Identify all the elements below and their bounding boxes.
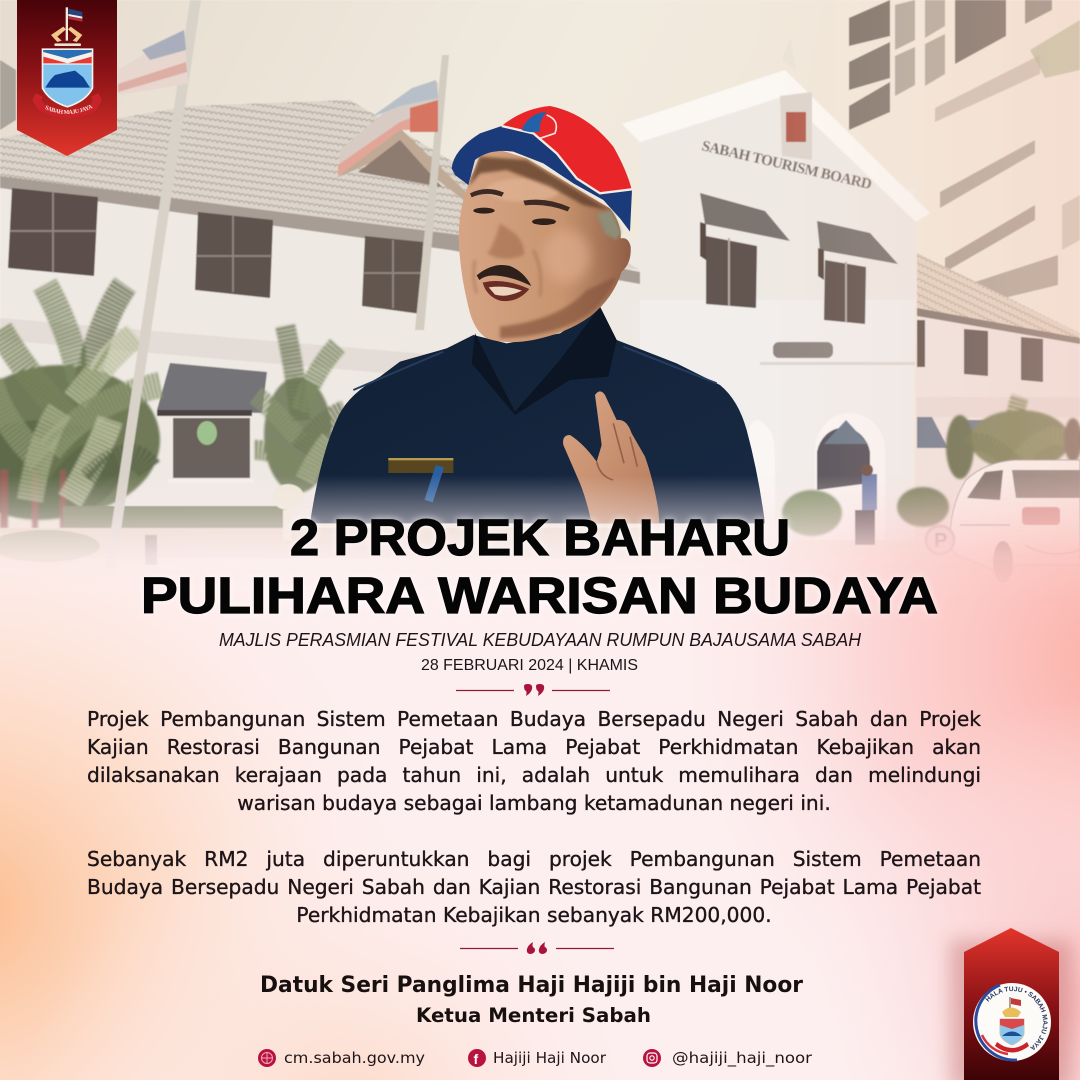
lower window and awning: [173, 418, 250, 478]
hand: [563, 391, 659, 523]
main gable building: SABAH TOURISM BOARD: [700, 138, 873, 193]
visor shadow on forehead: [468, 157, 608, 210]
title: 2 PROJEK BAHARU: [290, 509, 790, 566]
footer: facebook: Hajiji Haji Noor: [493, 1049, 607, 1067]
crest: [32, 7, 102, 118]
divider with quote marks top: [456, 684, 610, 696]
windows: [8, 188, 98, 276]
emblem circle: [973, 983, 1051, 1062]
paragraph one: warisan budaya sebagai lambang ketamadunan negeri ini.: [237, 791, 831, 815]
cheek highlight: [543, 230, 590, 283]
name badge: [388, 458, 453, 473]
ribbon shape: [964, 928, 1059, 1080]
forehead highlight: [487, 178, 560, 202]
warm tint wash: [0, 0, 1080, 620]
ribbon logo: Sabah crest: [17, 0, 117, 156]
left building wall and roof: [0, 100, 640, 520]
paragraph two: Budaya Bersepadu Negeri Sabah dan Kajian Restorasi Bangunan Pejabat Lama Pejabat: [87, 875, 981, 899]
footer: website: cm.sabah.gov.my: [284, 1049, 425, 1067]
position: Ketua Menteri Sabah: [416, 1004, 651, 1027]
title: PULIHARA WARISAN BUDAYA: [141, 567, 938, 624]
crest: SABAH MAJU JAYA: [45, 104, 93, 114]
ribbon shape: [17, 0, 117, 156]
eyes and brows: [470, 189, 570, 211]
paragraph two: [87, 847, 981, 927]
background photo: Sabah Tourism Board building: [0, 0, 1080, 620]
cap: [452, 106, 632, 232]
flag poles and flags: [105, 0, 449, 570]
paragraph two: Perkhidmatan Kebajikan sebanyak RM200,000.: [296, 903, 772, 927]
palm by the window: [255, 325, 345, 493]
divider with quote marks bottom: [460, 942, 614, 954]
icon: facebook: f: [474, 1051, 478, 1067]
emblem circle: HALA TUJU • SABAH MAJU JAYA: [985, 986, 1048, 1050]
palms left: [0, 285, 160, 530]
high-rise tower: [835, 0, 1080, 340]
face: [459, 150, 631, 342]
paragraph two: Sebanyak RM2 juta diperuntukkan bagi projek Pembangunan Sistem Pemetaan: [87, 847, 981, 871]
nose and cheek folds: [487, 223, 524, 259]
portrait: speaker in red cap and navy shirt: [310, 106, 765, 523]
paragraph one: [87, 707, 982, 815]
parking sign: P: [934, 530, 947, 552]
parking sign: [926, 526, 954, 554]
ribbon glow: [950, 940, 1072, 1080]
icon: globe: [258, 1049, 276, 1067]
hedge and ground: [0, 484, 640, 565]
right wing: [917, 253, 1080, 540]
shoulder seams: [353, 347, 717, 390]
jaw shadow: [500, 277, 617, 338]
sideburn: [597, 211, 621, 240]
distant grey building at far left: [0, 60, 16, 130]
main gable building: [622, 38, 930, 545]
paragraph one: Projek Pembangunan Sistem Pemetaan Budaya Bersepadu Negeri Sabah dan Projek: [87, 707, 981, 731]
icon: instagram: [643, 1049, 661, 1067]
collar: [472, 307, 617, 415]
shirt: [310, 307, 765, 523]
footer: instagram: @hajiji_haji_noor: [672, 1049, 813, 1068]
mouth and moustache: [477, 265, 531, 301]
right shrubs and palms: [782, 397, 1080, 536]
title: [141, 509, 938, 624]
bottom colour fade panel: [0, 478, 1080, 1080]
name: Datuk Seri Panglima Haji Hajiji bin Haji Noor: [260, 973, 803, 998]
paragraph one: Kajian Restorasi Bangunan Pejabat Lama Pejabat Perkhidmatan Kebajikan akan: [87, 735, 981, 759]
ribbon logo: Hala Tuju Sabah Maju Jaya: [941, 928, 1080, 1080]
subtitle: MAJLIS PERASMIAN FESTIVAL KEBUDAYAAN RUMPUN BAJAUSAMA SABAH: [219, 630, 862, 650]
date: 28 FEBRUARI 2024 | KHAMIS: [421, 657, 638, 674]
paragraph one: dilaksanakan kerajaan pada tahun ini, adalah untuk memulihara dan melindungi: [87, 763, 981, 787]
white car: [950, 460, 1080, 583]
